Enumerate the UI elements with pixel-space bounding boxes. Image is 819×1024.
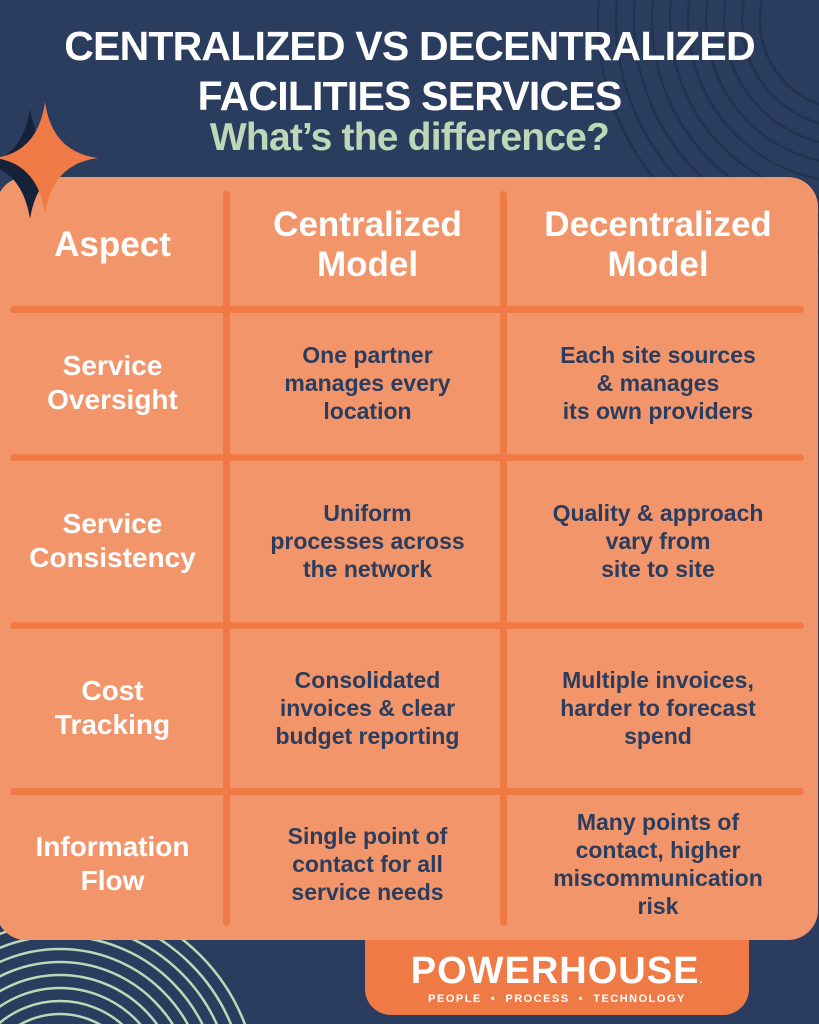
- title: CENTRALIZED VS DECENTRALIZED: [64, 23, 755, 69]
- text: manages every: [284, 370, 451, 396]
- text: the network: [303, 556, 432, 582]
- text: risk: [638, 893, 678, 919]
- row: cost tracking: Tracking: [55, 709, 170, 740]
- row: service consistency: [29, 508, 196, 573]
- text: site to site: [601, 556, 715, 582]
- row: information flow: Information: [36, 831, 190, 862]
- text: miscommunication: [553, 865, 763, 891]
- text: location: [323, 398, 412, 424]
- row: service oversight: Oversight: [47, 384, 178, 415]
- text: One partner: [302, 342, 433, 368]
- text: spend: [624, 723, 692, 749]
- logo tab: PEOPLE • PROCESS • TECHNOLOGY: [428, 993, 686, 1005]
- title: [64, 23, 755, 119]
- text: contact for all: [292, 851, 443, 877]
- text: invoices & clear: [280, 695, 455, 721]
- text: Many points of: [577, 809, 739, 835]
- text: Consolidated: [295, 667, 440, 693]
- row: cost tracking: [55, 675, 170, 740]
- text: Model: [317, 245, 418, 284]
- text: Centralized: [273, 205, 462, 244]
- subtitle: What’s the difference?: [210, 116, 609, 159]
- header row: Aspect: [54, 225, 171, 264]
- row: service consistency: Consistency: [29, 542, 196, 573]
- text: Multiple invoices,: [562, 667, 754, 693]
- logo tab: POWERHOUSE.: [411, 950, 703, 992]
- text: service needs: [291, 879, 444, 905]
- text: Decentralized: [544, 205, 772, 244]
- comparison table panel: [0, 177, 818, 940]
- text: harder to forecast: [560, 695, 756, 721]
- logo tab: [365, 920, 749, 1015]
- text: budget reporting: [276, 723, 459, 749]
- title: FACILITIES SERVICES: [198, 73, 621, 119]
- text: Uniform: [323, 500, 412, 526]
- text: Quality & approach: [553, 500, 763, 526]
- row: information flow: Flow: [81, 865, 144, 896]
- row: service oversight: [47, 350, 178, 415]
- text: Each site sources: [560, 342, 756, 368]
- row: information flow: [36, 831, 190, 896]
- text: processes across: [270, 528, 465, 554]
- text: & manages: [597, 370, 719, 396]
- row: cost tracking: Cost: [81, 675, 144, 706]
- text: vary from: [606, 528, 710, 554]
- text: Model: [607, 245, 709, 284]
- text: its own providers: [563, 398, 753, 424]
- text: Single point of: [288, 823, 447, 849]
- row: service oversight: Service: [63, 350, 162, 381]
- star icon: [0, 102, 98, 219]
- text: contact, higher: [576, 837, 740, 863]
- row: service consistency: Service: [63, 508, 162, 539]
